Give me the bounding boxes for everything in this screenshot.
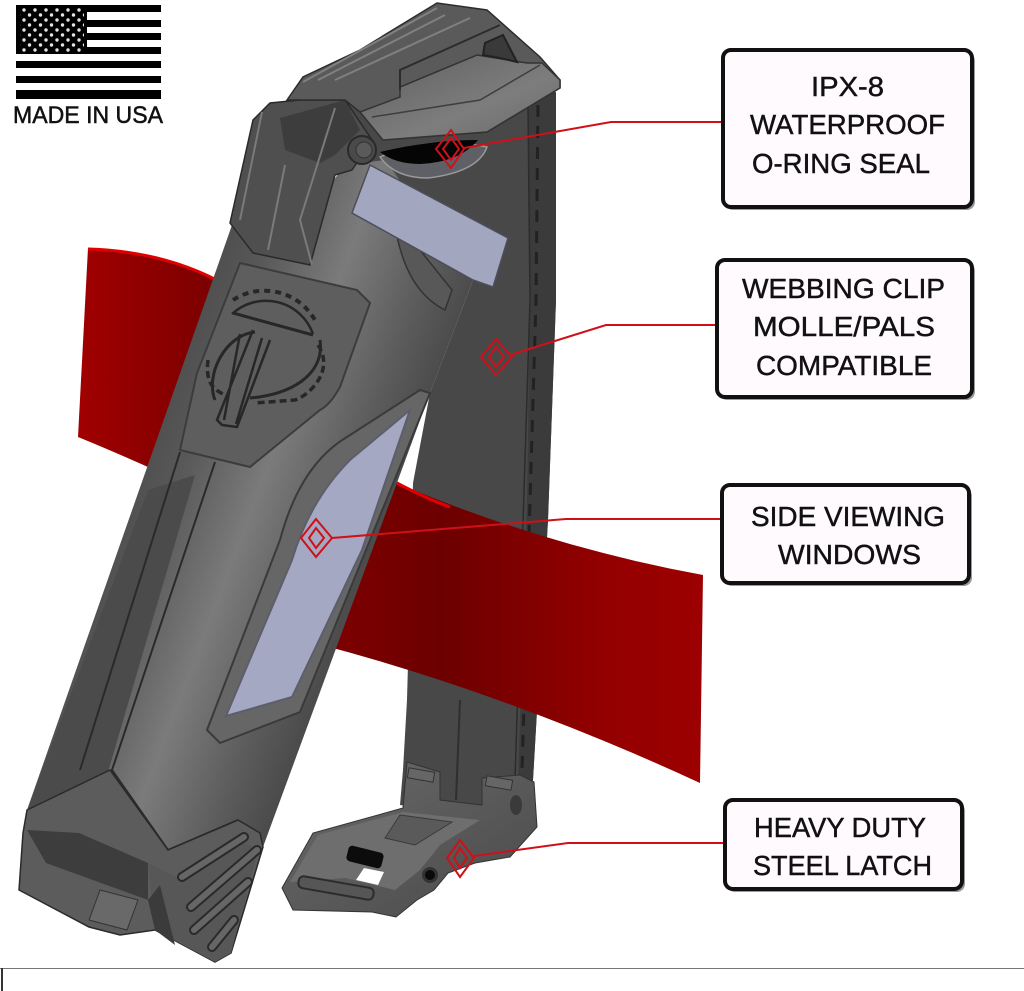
red webbing strap: left section [78,248,226,471]
callout: side viewing windows: WINDOWS [778,539,921,570]
side viewing window [226,410,410,716]
callout: webbing clip molle/pals compatible: WEBBING CLIP [742,273,945,304]
gear logo emblem [207,291,324,427]
callout leader: o-ring seal [436,122,723,168]
callout: ipx-8 waterproof o-ring seal [723,50,975,210]
callout: heavy duty steel latch [725,800,965,892]
callout: webbing clip molle/pals compatible: MOLLE/PALS [753,311,935,342]
emblem panel [180,263,370,467]
callout: ipx-8 waterproof o-ring seal: IPX-8 [811,71,884,102]
callout: side viewing windows [722,485,972,586]
callout leader: side windows [301,519,722,557]
webbing clip back plate [340,90,556,827]
callout: heavy duty steel latch: HEAVY DUTY [754,812,926,843]
o-ring black gap [380,140,478,164]
main tube body [27,160,473,862]
top lid cap [287,3,560,164]
callout: ipx-8 waterproof o-ring seal: O-RING SEAL [752,148,930,179]
hinge bracket [230,100,372,265]
red webbing strap: right section [322,480,703,783]
strap highlight edges [88,249,450,507]
bottom border line [0,968,1024,991]
o-ring seal [380,143,487,178]
bottom end cap [19,770,263,962]
callout leader: webbing clip [481,325,716,375]
callout leader: steel latch [447,840,724,877]
callout: side viewing windows: SIDE VIEWING [751,501,945,532]
pocket clip strap [352,165,508,287]
callout: ipx-8 waterproof o-ring seal: WATERPROOF [750,109,945,140]
steel latch foot [282,762,537,917]
side viewing window surround [207,390,430,743]
callout: heavy duty steel latch: STEEL LATCH [753,850,932,881]
made in usa label: MADE IN USA [13,102,163,129]
icon: american flag [16,5,161,99]
callout: webbing clip molle/pals compatible [717,260,975,400]
callout: webbing clip molle/pals compatible: COMPATIBLE [756,350,932,381]
